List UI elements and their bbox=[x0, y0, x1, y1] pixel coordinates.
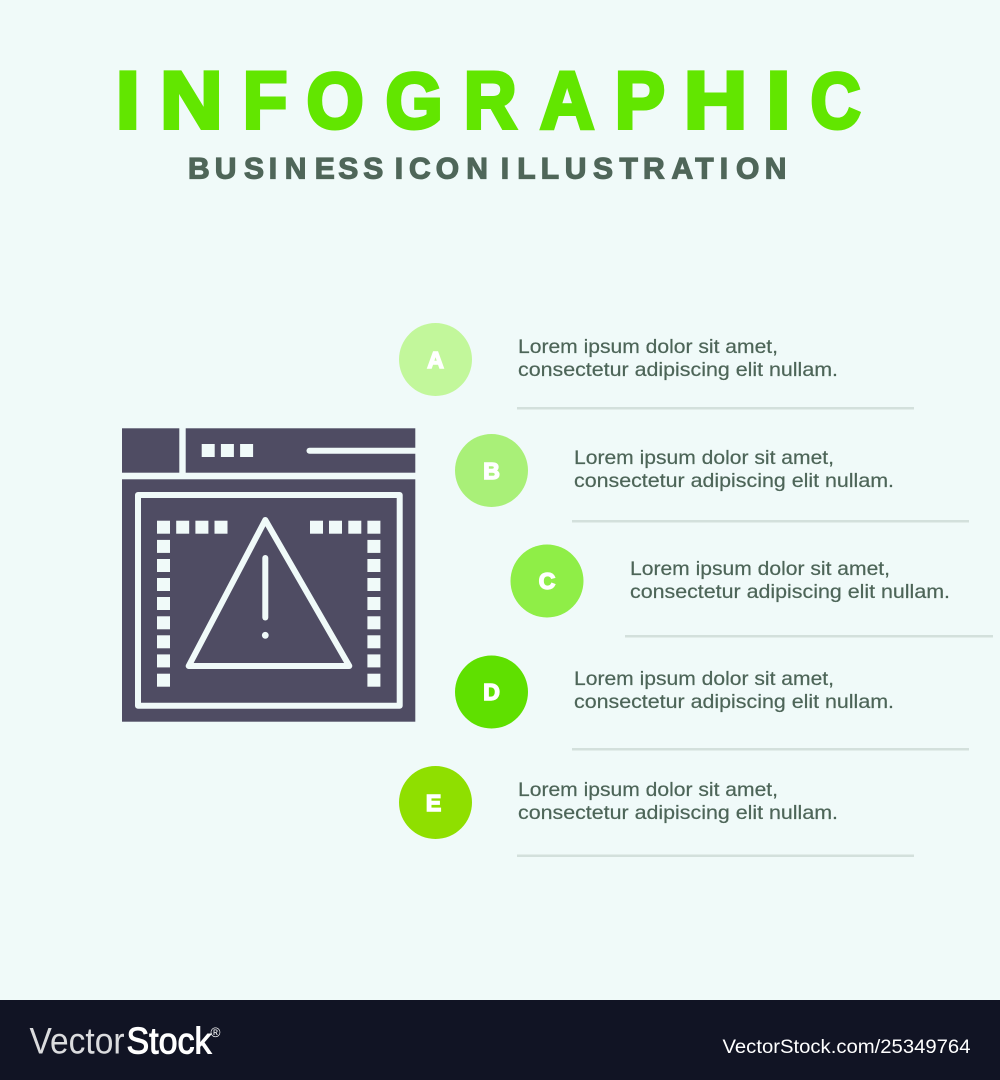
subtitle: BUSINESS bbox=[188, 152, 383, 186]
footer logo bbox=[30, 1020, 220, 1062]
text block C: consectetur adipiscing elit nullam. bbox=[630, 581, 950, 603]
footer bar bbox=[0, 1000, 1000, 1080]
icon: browser window with warning triangle bbox=[122, 428, 415, 722]
text block A: Lorem ipsum dolor sit amet, bbox=[518, 336, 778, 358]
badge B bbox=[455, 434, 528, 507]
footer logo: Vector bbox=[30, 1020, 124, 1062]
title: R bbox=[464, 56, 517, 146]
text block A: consectetur adipiscing elit nullam. bbox=[518, 359, 838, 381]
text block E bbox=[518, 779, 838, 824]
badge B: B bbox=[483, 458, 500, 484]
badge C bbox=[510, 544, 584, 618]
footer image id: VectorStock.com/25349764 bbox=[722, 1036, 971, 1058]
badge C: C bbox=[539, 568, 555, 594]
badge E bbox=[399, 766, 472, 839]
footer logo: ® bbox=[210, 1025, 220, 1040]
text block B bbox=[574, 447, 894, 492]
text block D bbox=[574, 668, 894, 713]
step E bbox=[399, 766, 914, 857]
text block E: Lorem ipsum dolor sit amet, bbox=[518, 779, 778, 801]
text block C: Lorem ipsum dolor sit amet, bbox=[630, 558, 890, 580]
step C bbox=[510, 544, 993, 638]
title: C bbox=[811, 56, 861, 144]
text block A bbox=[518, 336, 838, 381]
step A bbox=[399, 323, 914, 410]
title bbox=[116, 56, 861, 146]
title: P bbox=[615, 56, 665, 146]
title: I bbox=[766, 56, 791, 146]
step D bbox=[455, 656, 969, 750]
subtitle: ILLUSTRATION bbox=[501, 152, 786, 186]
text block E: consectetur adipiscing elit nullam. bbox=[518, 802, 838, 824]
text block D: Lorem ipsum dolor sit amet, bbox=[574, 668, 834, 690]
title: F bbox=[243, 56, 287, 146]
badge D bbox=[455, 656, 528, 728]
text block D: consectetur adipiscing elit nullam. bbox=[574, 691, 894, 713]
subtitle bbox=[188, 152, 786, 186]
badge A: A bbox=[427, 347, 444, 373]
subtitle: ICON bbox=[395, 152, 488, 186]
footer logo: Stock bbox=[126, 1020, 212, 1062]
text block C bbox=[630, 558, 950, 603]
text block B: consectetur adipiscing elit nullam. bbox=[574, 470, 894, 492]
title: H bbox=[684, 56, 747, 146]
title: O bbox=[307, 56, 364, 144]
title: I bbox=[116, 56, 140, 146]
title: N bbox=[160, 56, 223, 146]
badge A bbox=[399, 323, 472, 396]
badge E: E bbox=[426, 790, 441, 816]
step B bbox=[455, 434, 969, 522]
badge D: D bbox=[483, 679, 500, 705]
title: G bbox=[386, 56, 443, 144]
title: A bbox=[540, 56, 594, 146]
text block B: Lorem ipsum dolor sit amet, bbox=[574, 447, 834, 469]
